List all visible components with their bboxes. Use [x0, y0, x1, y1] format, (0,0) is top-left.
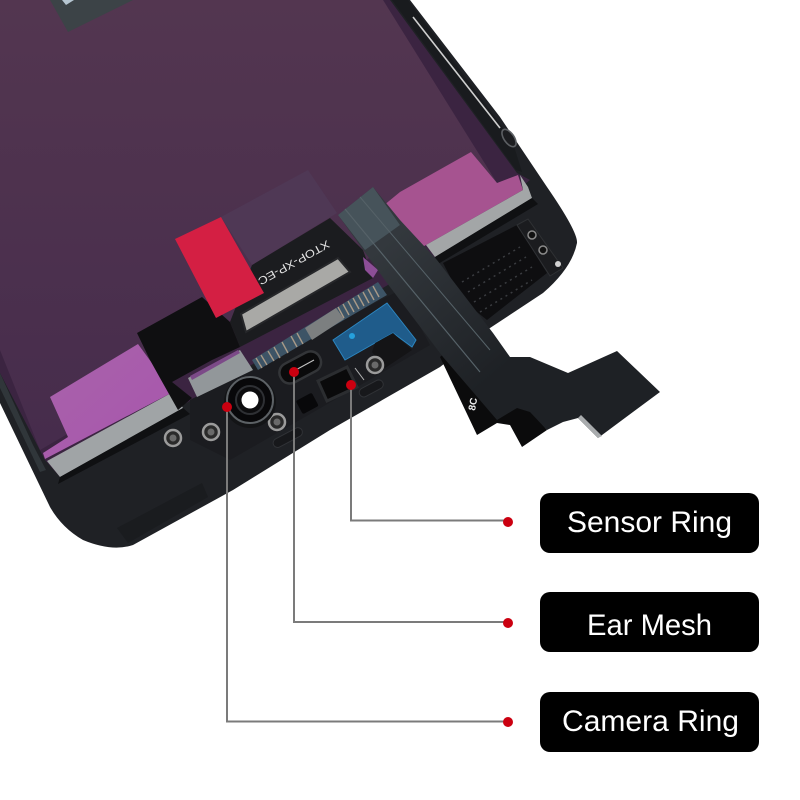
small purple piece: [363, 257, 378, 278]
black patch right of sensor: [372, 333, 412, 368]
flex label text: 8C: [467, 397, 480, 412]
phone frame: [0, 0, 577, 548]
pink foam: right: [360, 152, 523, 270]
leader: camera ring: [222, 402, 513, 727]
right edge bezel: [392, 0, 522, 172]
grey strip: middle: [188, 350, 253, 397]
label: camera ring: Camera Ring: [562, 705, 739, 738]
screw: camera right: [269, 414, 285, 430]
dark lower border under right strip: [435, 198, 538, 264]
pink foam: left: [43, 344, 173, 459]
striped flex cable: [252, 282, 387, 370]
red tab: [175, 217, 264, 318]
flex ribbon: [338, 187, 660, 438]
grey strip: left: [47, 392, 183, 477]
screw: far left: [165, 430, 181, 446]
tag at top left: [50, 0, 133, 32]
silver connector: [241, 258, 350, 332]
label: ear mesh: Ear Mesh: [587, 609, 712, 642]
lower slot: [272, 426, 304, 449]
leader: sensor ring: [346, 380, 513, 527]
camera bracket dark area: [190, 290, 430, 460]
black board: [230, 218, 373, 347]
ear mesh: [276, 348, 325, 387]
transparent film: [221, 170, 337, 265]
middle sensor window: [296, 393, 319, 414]
speaker mesh speckle: [462, 247, 532, 312]
white edge highlight: [413, 17, 500, 128]
right speaker: [443, 219, 563, 320]
purple sliver: [190, 350, 240, 380]
grey strip: right: [426, 175, 532, 257]
leader: ear mesh: [289, 367, 513, 628]
black tape: [137, 297, 240, 410]
screw: right: [367, 357, 383, 373]
display backing: purple: [0, 0, 530, 477]
label: camera ring: [540, 692, 759, 752]
speaker screws: [528, 231, 536, 239]
label: sensor ring: [540, 493, 759, 553]
left edge bezel: [0, 373, 46, 472]
camera ring: [224, 376, 276, 428]
sensor slot: [358, 378, 385, 399]
label: sensor ring: Sensor Ring: [567, 506, 732, 539]
sensor ring: [318, 367, 364, 401]
blue sticker: [333, 303, 416, 360]
screw: camera left: [203, 424, 219, 440]
board label text: XTOP-XP-EC: [256, 237, 331, 287]
label: ear mesh: [540, 592, 759, 652]
dark lower border under left strip: [58, 408, 190, 484]
flex underlay: [440, 340, 547, 447]
lower bracket detail: [117, 483, 208, 543]
side clip: [499, 127, 519, 149]
